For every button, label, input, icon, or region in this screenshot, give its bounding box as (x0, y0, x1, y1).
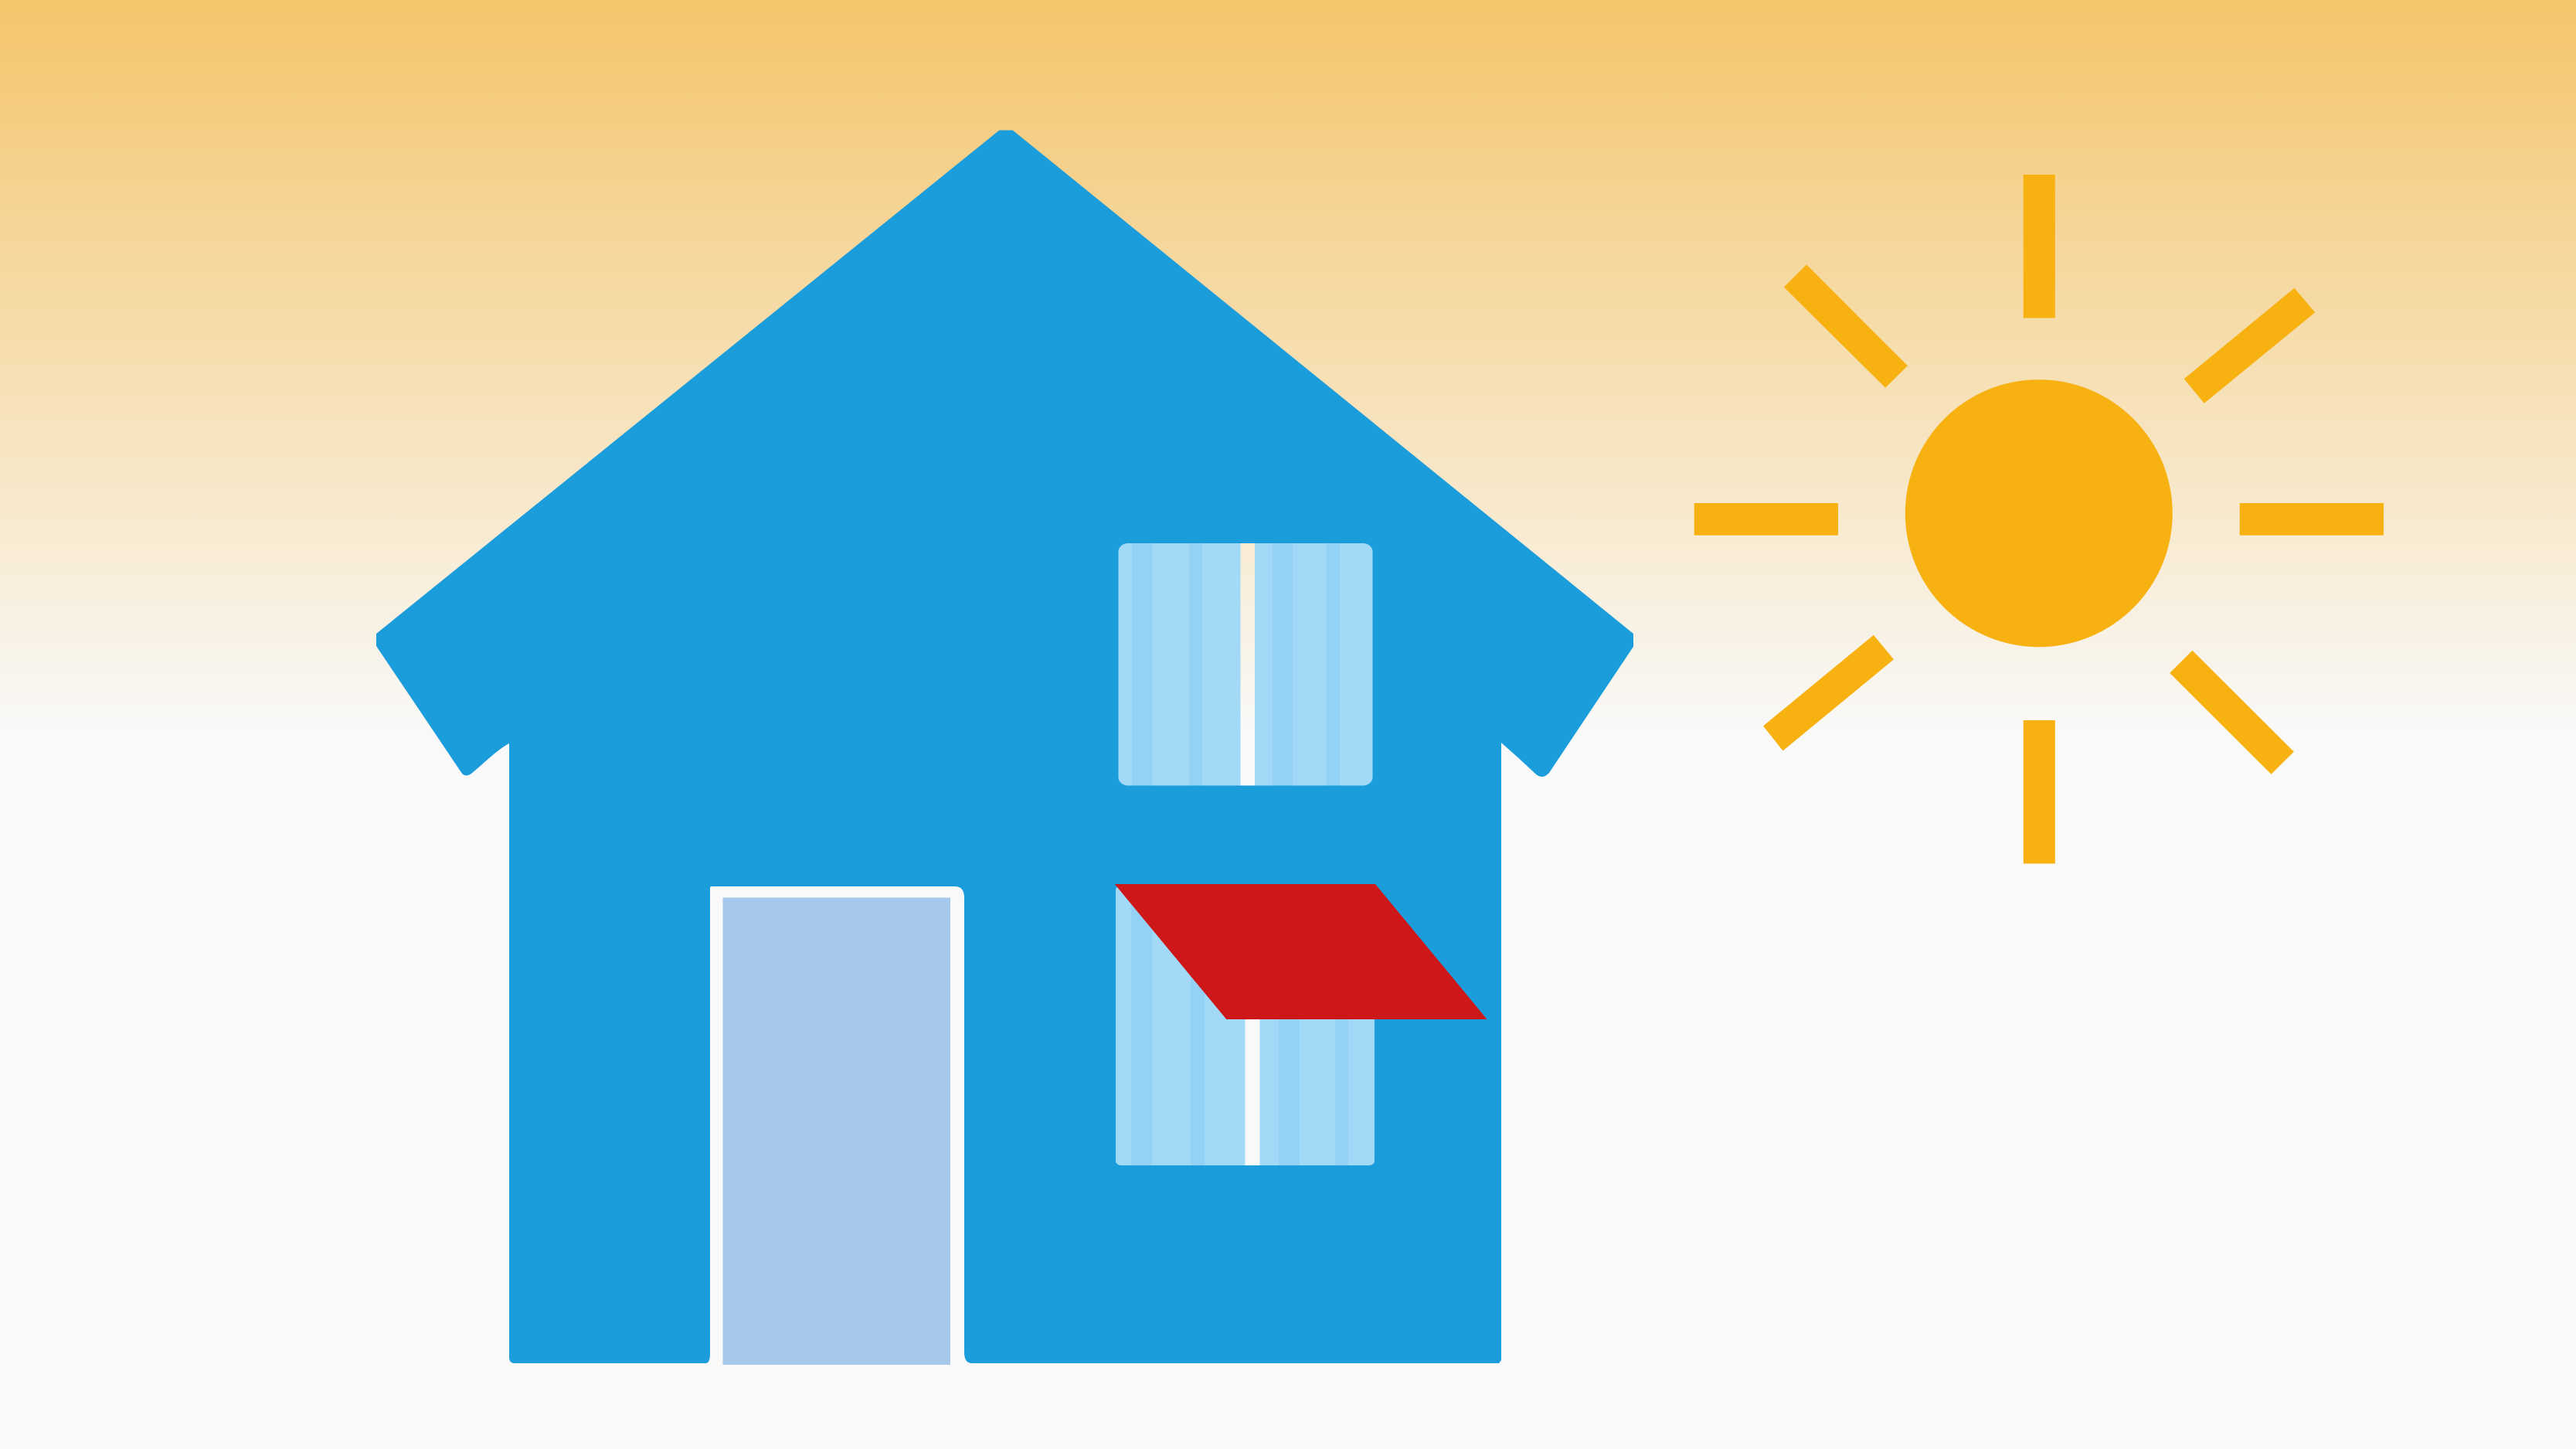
lower window pane (1116, 886, 1375, 1165)
ray: bottom (2024, 720, 2055, 864)
ray: bottom left (1763, 635, 1894, 751)
icon: house (376, 130, 1633, 1365)
ray: top (2024, 175, 2055, 318)
icon: sun (1694, 175, 2384, 864)
upper window (1119, 543, 1372, 785)
ray: right (2240, 503, 2384, 536)
door (723, 898, 950, 1365)
upper window centre gap (1241, 543, 1255, 785)
upper window stripes (1132, 543, 1340, 785)
ray: bottom right (2170, 651, 2294, 774)
sun disc (1905, 379, 2173, 647)
ray: left (1694, 503, 1838, 536)
lower window stripes (1131, 886, 1348, 1165)
upper window pane (1119, 543, 1372, 785)
ray: top left (1784, 264, 1908, 388)
house body and roof (376, 130, 1633, 1363)
awning (1115, 884, 1487, 1019)
lower window (1116, 886, 1375, 1165)
lower window centre gap (1246, 886, 1259, 1165)
ray: top right (2184, 288, 2315, 403)
